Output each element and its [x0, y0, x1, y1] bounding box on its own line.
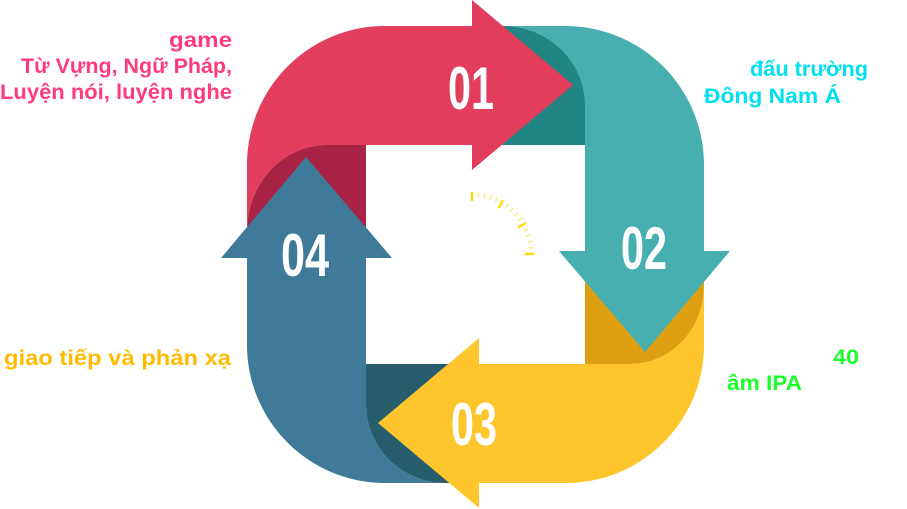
gauge ticks	[472, 192, 534, 254]
text block: 40 IPA sounds: 40	[833, 345, 859, 369]
text block: game, vocabulary, speaking: game	[169, 28, 232, 52]
number 02: 02	[621, 215, 667, 282]
text block: game, vocabulary, speaking: Từ Vựng, Ngữ Pháp,	[21, 54, 232, 78]
text block: 40 IPA sounds	[727, 345, 859, 395]
shadow fold: dark teal behind arrow 01	[495, 26, 585, 145]
shadow fold: dark blue behind arrow 03	[366, 364, 452, 483]
text block: arena	[704, 57, 868, 108]
text block: 40 IPA sounds: âm IPA	[727, 371, 802, 395]
text block: game, vocabulary, speaking	[0, 28, 232, 104]
arrow 01: red	[247, 0, 573, 240]
arrow 04: blue	[221, 157, 470, 483]
shadow fold: dark gold behind arrow 02	[585, 275, 704, 364]
text block: arena: đấu trường	[750, 57, 868, 81]
number 01: 01	[448, 55, 494, 122]
number 03: 03	[451, 391, 497, 458]
text block: game, vocabulary, speaking: Luyện nói, luyện nghe	[0, 80, 232, 104]
arrow 02: teal	[503, 26, 730, 352]
text block: communication and reflex: giao tiếp và phản xạ	[4, 346, 232, 370]
number 04: 04	[281, 222, 329, 289]
shadow fold: dark red behind arrow 04	[247, 145, 366, 240]
text block: arena: Đông Nam Á	[704, 83, 841, 108]
arrow 03: yellow	[378, 280, 704, 508]
